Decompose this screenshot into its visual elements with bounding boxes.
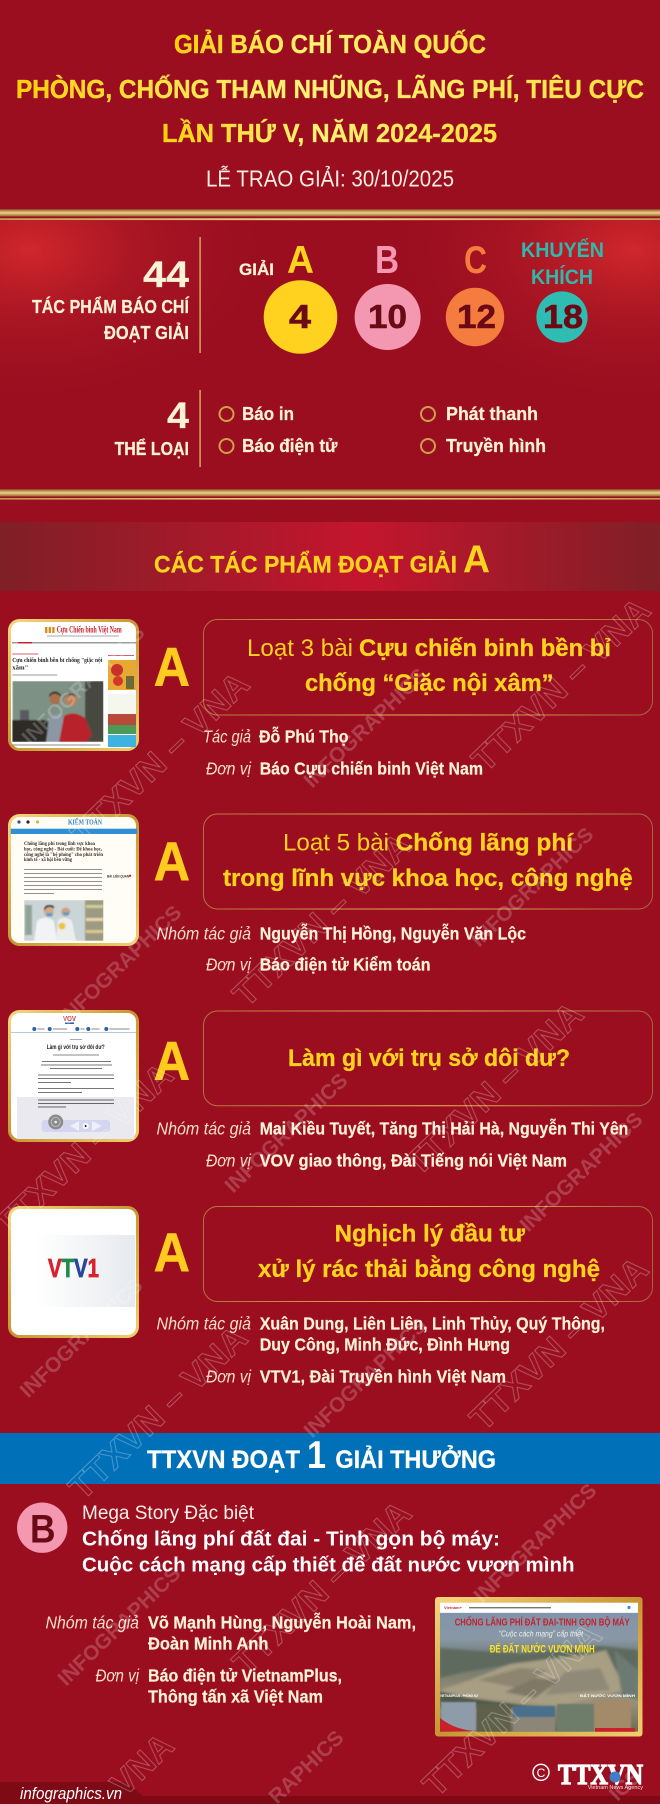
thumbnail: VOV article: Làm gì với trụ sở dôi dư? <box>47 1045 105 1051</box>
credits: Đơn vị <box>206 758 252 778</box>
title: PHÒNG, CHỐNG THAM NHŨNG, LÃNG PHÍ, TIÊU CỰC <box>16 74 644 104</box>
category list: Báo điện tử <box>242 436 338 456</box>
credits: Nhóm tác giả <box>156 1118 251 1138</box>
title box: xử lý rác thải bằng công nghệ <box>258 1255 600 1283</box>
categories count <box>114 395 189 459</box>
title box: trong lĩnh vực khoa học, công nghệ <box>223 865 633 892</box>
title box <box>204 1011 652 1106</box>
categories count: 4 <box>167 395 189 436</box>
credits: Tác giả <box>203 727 251 747</box>
TTXVN logo <box>533 1760 643 1791</box>
title box <box>204 620 652 715</box>
category list: Báo in <box>242 404 294 424</box>
section header: TTXVN wins 1 prize: 1 <box>307 1434 326 1477</box>
watermark overlay: TTXVN – VNA <box>226 1494 419 1682</box>
thumbnail: VOV article <box>10 1012 138 1140</box>
prize A count: A <box>287 239 314 282</box>
prize letter A: A <box>154 1030 190 1091</box>
watermark overlay <box>0 591 658 1804</box>
credits: VOV giao thông, Đài Tiếng nói Việt Nam <box>260 1151 567 1171</box>
encouragement prize count: KHUYẾN <box>521 239 604 262</box>
credits: Đỗ Phú Thọ <box>259 726 348 747</box>
credits: Đơn vị <box>206 1151 252 1171</box>
credits <box>156 1117 628 1171</box>
encouragement prize count: 18 <box>543 298 583 335</box>
watermark overlay: TTXVN – VNA <box>62 1319 255 1507</box>
credits: Đơn vị <box>206 955 252 975</box>
thumbnail: VTV1 logo: VTV1 <box>48 1253 99 1283</box>
thumbnail: VTV1 logo <box>10 1208 138 1336</box>
prize badge B: B <box>30 1508 56 1552</box>
thumbnail: Cựu Chiến binh Việt Nam article <box>10 620 138 750</box>
categories count: THỂ LOẠI <box>114 438 189 459</box>
credits: Võ Mạnh Hùng, Nguyễn Hoài Nam, <box>148 1611 416 1632</box>
prize letter A: A <box>154 1222 190 1283</box>
panel: work 2 <box>10 814 652 975</box>
watermark overlay: INFOGRAPHICS <box>516 1108 647 1237</box>
title box: Chống lãng phí <box>396 830 574 857</box>
section header: TTXVN wins 1 prize: GIẢI THƯỞNG <box>335 1444 496 1474</box>
panel: statistics <box>0 220 660 489</box>
title box <box>204 814 652 909</box>
credits: Nhóm tác giả <box>156 923 251 943</box>
watermark overlay: TTXVN – VNA <box>226 826 419 1014</box>
credits: Nguyễn Thị Hồng, Nguyễn Văn Lộc <box>260 922 526 943</box>
credits: Duy Công, Minh Đức, Đình Hưng <box>260 1335 510 1355</box>
thumbnail: VietnamPlus mega story: VIETNAMPLUS . PHÓNG SỰ <box>440 1693 478 1698</box>
title box: Loạt 3 bài <box>247 635 353 662</box>
title box <box>204 1206 652 1302</box>
credits: VTV1, Đài Truyền hình Việt Nam <box>260 1367 506 1387</box>
thumbnail: VietnamPlus mega story: ĐẤT NƯỚC VƯƠN MÌNH <box>580 1693 635 1698</box>
watermark overlay: TTXVN – VNA <box>398 995 591 1183</box>
encouragement prize count: KHÍCH <box>531 266 593 289</box>
footer strip <box>0 1782 660 1804</box>
watermark overlay: TTXVN – VNA <box>465 591 658 779</box>
section header: prize A works: A <box>463 539 490 582</box>
credits <box>46 1611 416 1707</box>
watermark overlay: INFOGRAPHICS <box>221 1069 352 1198</box>
TTXVN logo: TTXVN <box>558 1760 643 1791</box>
source url: infographics.vn <box>20 1784 122 1803</box>
thumbnail: Kiểm toán article <box>10 816 138 944</box>
panel: work 4 <box>10 1206 652 1387</box>
credits <box>156 922 526 975</box>
work title: Chống lãng phí đất đai - Tinh gọn bộ máy: <box>82 1528 500 1551</box>
credits: Xuân Dung, Liên Liên, Linh Thủy, Quý Thông, <box>260 1313 605 1333</box>
watermark overlay: TTXVN – VNA <box>64 665 257 853</box>
title <box>16 29 644 148</box>
work title: Cuộc cách mạng cấp thiết để đất nước vươn mình <box>82 1554 574 1577</box>
watermark overlay: INFOGRAPHICS <box>300 664 431 793</box>
watermark overlay: INFOGRAPHICS <box>300 1314 431 1443</box>
section header: TTXVN wins 1 prize <box>0 1433 660 1484</box>
credits: Nhóm tác giả <box>46 1612 139 1632</box>
watermark overlay: INFOGRAPHICS <box>18 621 149 750</box>
panel: work 3 <box>10 1011 652 1171</box>
credits: Đơn vị <box>96 1666 140 1686</box>
title: GIẢI BÁO CHÍ TOÀN QUỐC <box>174 29 486 59</box>
thumbnail: Cựu Chiến binh Việt Nam article: xâm" <box>12 665 28 671</box>
credits: Báo Cựu chiến binh Việt Nam <box>260 758 483 778</box>
credits: Mai Kiều Tuyết, Tăng Thị Hải Hà, Nguyễn Thi Yên <box>260 1117 628 1138</box>
watermark overlay: INFOGRAPHICS <box>467 823 598 952</box>
thumbnail: VietnamPlus mega story: Vietnam+ <box>444 1606 462 1610</box>
prize C count: 12 <box>457 298 496 335</box>
category list: Phát thanh <box>446 404 538 424</box>
section header: prize A works: CÁC TÁC PHẨM ĐOẠT GIẢI <box>154 550 457 579</box>
title box: Loạt 5 bài <box>283 830 389 857</box>
panel: TTXVN prize B <box>17 1502 642 1736</box>
title box: Làm gì với trụ sở dôi dư? <box>288 1045 570 1072</box>
prize B count: 10 <box>368 298 407 335</box>
credits <box>203 726 483 778</box>
thumbnail: VietnamPlus mega story: “Cuộc cách mạng” cấp thiết <box>499 1630 584 1639</box>
thumbnail: Cựu Chiến binh Việt Nam article: Cựu Chiến binh Việt Nam <box>57 624 122 636</box>
watermark overlay: INFOGRAPHICS <box>54 1562 185 1691</box>
total winning works: ĐOẠT GIẢI <box>104 322 189 343</box>
watermark overlay: TTXVN – VNA <box>416 1616 609 1804</box>
prize A count: 4 <box>289 298 312 335</box>
award ceremony date: LỄ TRAO GIẢI: 30/10/2025 <box>206 164 454 192</box>
prize badge B <box>17 1502 67 1553</box>
section header: TTXVN wins 1 prize: TTXVN ĐOẠT <box>147 1446 300 1474</box>
watermark overlay: TTXVN – VNA <box>463 1250 656 1438</box>
thumbnail: Kiểm toán article: công nghệ là "bệ phóng" cho phát triển <box>24 851 103 858</box>
watermark overlay: VNA <box>103 1726 181 1804</box>
thumbnail: Kiểm toán article: học, công nghệ - Bài cuối: Để khoa học, <box>24 846 103 853</box>
prize B count: B <box>375 239 399 282</box>
category list <box>220 404 546 456</box>
credits: Thông tấn xã Việt Nam <box>148 1687 323 1707</box>
section header: prize A works <box>0 522 660 591</box>
credits: Đoàn Minh Anh <box>148 1633 268 1653</box>
thumbnail: VietnamPlus mega story <box>435 1597 642 1736</box>
total winning works: TÁC PHẨM BÁO CHÍ <box>32 296 190 317</box>
watermark overlay: INFOGRAPHICS <box>55 901 186 1030</box>
thumbnail: Kiểm toán article: Chống lãng phí trong lĩnh vực khoa <box>24 840 95 847</box>
thumbnail: VOV article: VOV <box>63 1014 76 1023</box>
work title: Mega Story Đặc biệt <box>82 1502 255 1524</box>
encouragement prize count <box>521 239 604 343</box>
thumbnail: Kiểm toán article: kinh tế - xã hội bền vững <box>24 856 72 863</box>
prize C count: C <box>464 239 487 282</box>
thumbnail: VietnamPlus mega story: ĐỂ ĐẤT NƯỚC VƯƠN MÌNH <box>490 1643 595 1656</box>
total winning works <box>32 254 190 343</box>
prize B count <box>355 239 421 350</box>
panel: work 1 <box>10 620 652 778</box>
title box: Cựu chiến binh bền bỉ <box>359 635 611 662</box>
thumbnail: Cựu Chiến binh Việt Nam article: Cựu chiến binh bền bỉ chống "giặc nội <box>12 657 103 664</box>
prize C count <box>446 239 504 346</box>
thumbnail: Kiểm toán article: BÀI LIÊN QUAN <box>107 873 129 878</box>
TTXVN logo: C <box>537 1766 546 1780</box>
credits: Báo điện tử Kiểm toán <box>260 955 430 975</box>
watermark overlay: INFOGRAPHICS <box>470 1479 601 1608</box>
title box: Nghịch lý đầu tư <box>335 1221 525 1248</box>
category list: Truyền hình <box>446 436 546 456</box>
credits <box>156 1313 605 1387</box>
prize letter A: A <box>154 637 190 698</box>
watermark overlay: INFOGRAPHICS <box>16 1274 147 1403</box>
title box: chống “Giặc nội xâm” <box>305 670 554 697</box>
thumbnail: Kiểm toán article: KIỂM TOÁN <box>68 817 102 827</box>
work title <box>82 1502 574 1577</box>
total winning works: 44 <box>143 254 189 295</box>
credits: Đơn vị <box>206 1367 252 1387</box>
title: LẦN THỨ V, NĂM 2024-2025 <box>162 118 497 148</box>
credits: Báo điện tử VietnamPlus, <box>148 1666 342 1686</box>
prize A count <box>239 239 337 354</box>
prize A count: GIẢI <box>239 260 274 279</box>
prize letter A: A <box>154 831 190 892</box>
credits: Nhóm tác giả <box>156 1313 251 1333</box>
TTXVN logo: Vietnam News Agency <box>588 1785 643 1791</box>
